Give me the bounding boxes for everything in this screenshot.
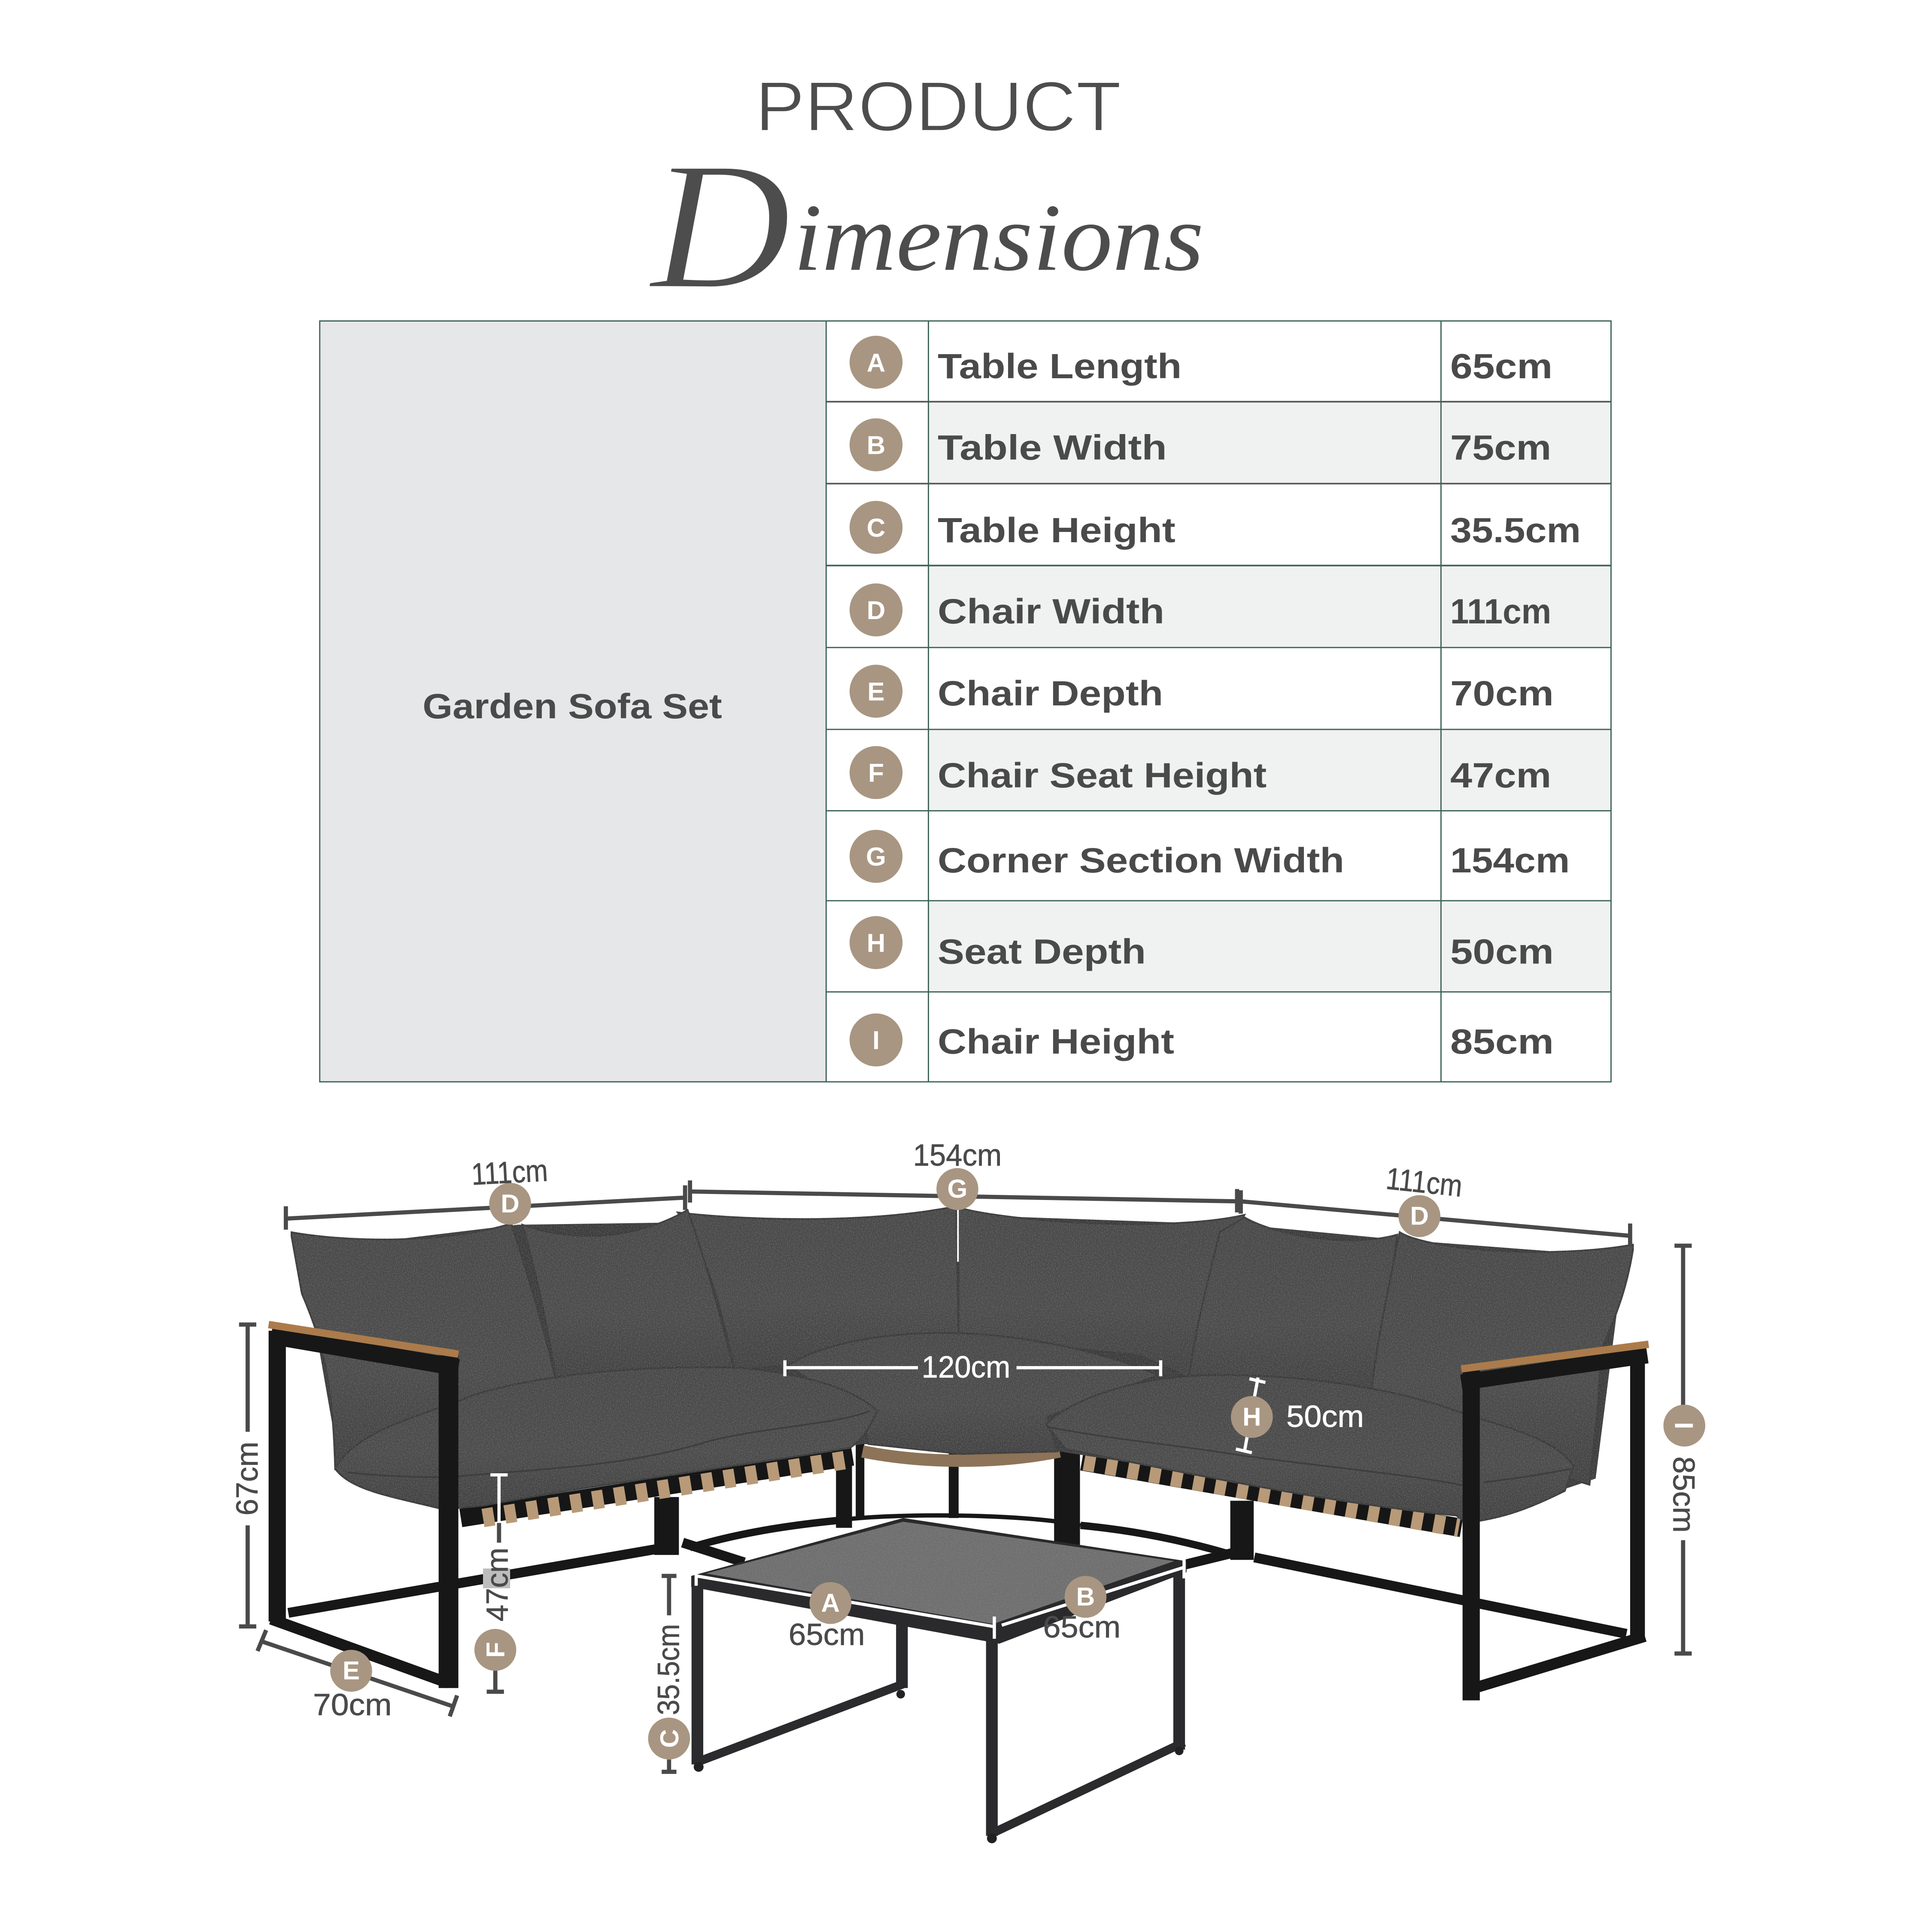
row D: chair width: D: [867, 595, 885, 625]
dimension H: H: [1242, 1402, 1261, 1431]
row H: seat depth: [850, 916, 1554, 971]
dimensions table: [320, 321, 1612, 1082]
left outer back cushion: [291, 1224, 557, 1469]
row B: table width: [850, 418, 1551, 471]
row E: chair depth: [850, 665, 1554, 718]
table measure lines: [696, 1558, 1184, 1639]
row A: table length: [850, 336, 1552, 389]
dimension D left: D: [501, 1189, 519, 1218]
row E: chair depth: E: [867, 677, 885, 706]
row D: chair width: Chair Width: [938, 592, 1164, 631]
row C: table height: Table Height: [938, 511, 1176, 550]
dimension I: 85cm: [1666, 1456, 1701, 1533]
back cushions and seat cushions: [291, 1206, 1634, 1523]
dimension A: 65cm: [789, 1617, 865, 1652]
row D: chair width: [850, 583, 1551, 636]
row E: chair depth: 70cm: [1450, 674, 1554, 713]
title: Dimensions: imensions: [793, 185, 1204, 291]
title: PRODUCT: PRODUCT: [755, 67, 1121, 146]
row I: chair height: [850, 1013, 1554, 1066]
row I: chair height: 85cm: [1450, 1022, 1554, 1061]
title: Dimensions: [647, 125, 1204, 327]
right inner back cushion: [1189, 1217, 1397, 1395]
cushion seams: [347, 1411, 1571, 1486]
centre seat cushion: [789, 1333, 1158, 1454]
dimension B: B: [1076, 1582, 1095, 1611]
product illustration: garden sofa set: [269, 1206, 1649, 1843]
sofa frame rear rails and legs: [289, 1444, 1626, 1634]
dimension E: [258, 1630, 457, 1722]
row B: table width: Table Width: [938, 428, 1167, 467]
table top frame: [691, 1518, 1187, 1643]
row G: corner section width: 154cm: [1450, 841, 1570, 880]
dimension C: 35.5cm: [651, 1624, 686, 1715]
row E: chair depth: Chair Depth: [938, 674, 1163, 713]
seat webbing: [461, 1452, 1461, 1528]
row F: chair seat height: Chair Seat Height: [938, 756, 1267, 795]
dimension D right: D: [1410, 1201, 1429, 1230]
row F: chair seat height: F: [868, 758, 884, 787]
dimension annotations: [230, 1138, 1705, 1772]
dimension F: [474, 1475, 516, 1692]
title: Dimensions: D: [647, 125, 791, 327]
dimension D left: [286, 1154, 685, 1230]
table feet: [694, 1690, 1184, 1843]
dimension C: C: [655, 1729, 684, 1748]
table grid lines: [826, 321, 1611, 1082]
row A: table length: 65cm: [1450, 347, 1552, 386]
table top surface: [706, 1522, 1174, 1624]
row A: table length: A: [867, 348, 885, 377]
dimension A: A: [821, 1588, 840, 1617]
row F: chair seat height: 47cm: [1450, 756, 1551, 795]
dimension E: E: [343, 1656, 360, 1685]
dimension H: [1231, 1378, 1364, 1453]
row B: table width: 75cm: [1450, 428, 1551, 467]
panel: product name cell: Garden Sofa Set: [422, 687, 722, 726]
right armrest frame: [1461, 1344, 1649, 1700]
dimension G: 154cm: [913, 1138, 1002, 1173]
centre left back cushion: [677, 1206, 959, 1370]
left inner back cushion: [522, 1210, 734, 1385]
dimension 120cm: [785, 1350, 1160, 1385]
row C: table height: 35.5cm: [1450, 511, 1581, 550]
cushion backing: [302, 1215, 1624, 1518]
dimension F: 47cm: [480, 1548, 514, 1622]
dimension G: G: [947, 1174, 967, 1203]
dimension B: [1043, 1576, 1121, 1644]
dimension 67cm: [230, 1323, 264, 1626]
centre right back cushion: [959, 1207, 1245, 1378]
row H: seat depth: 50cm: [1450, 932, 1554, 971]
table legs: [697, 1567, 1184, 1836]
row C: table height: C: [867, 513, 885, 542]
dimension 67cm: 67cm: [230, 1442, 264, 1516]
row G: corner section width: Corner Section Width: [938, 841, 1344, 880]
row I: chair height: I: [872, 1026, 880, 1055]
row G: corner section width: G: [866, 842, 886, 871]
row shading: [928, 402, 1612, 992]
row A: table length: Table Length: [938, 347, 1182, 386]
left wooden arm cap: [269, 1324, 459, 1354]
coffee table: [691, 1518, 1187, 1843]
dimension H: 50cm: [1286, 1399, 1364, 1434]
right wooden arm cap: [1461, 1344, 1649, 1369]
dimension I: I: [1670, 1422, 1699, 1429]
left seat cushion: [335, 1367, 877, 1510]
row F: chair seat height: [850, 746, 1551, 799]
row C: table height: [850, 501, 1581, 554]
dimension A: [789, 1582, 865, 1652]
row H: seat depth: H: [867, 928, 885, 957]
gap between centre back cushions: [957, 1209, 958, 1262]
dimension C: [648, 1576, 690, 1772]
dimension I: [1663, 1245, 1705, 1653]
left armrest frame: [269, 1324, 459, 1688]
dimension B: 65cm: [1043, 1610, 1121, 1644]
dimension G: [690, 1138, 1237, 1212]
dimension 120cm: 120cm: [922, 1350, 1010, 1385]
row B: table width: B: [867, 431, 885, 460]
dimension D right: [1241, 1161, 1630, 1247]
dimension F: F: [481, 1642, 510, 1658]
dimension D right: 111cm: [1385, 1161, 1464, 1203]
row H: seat depth: Seat Depth: [938, 932, 1146, 971]
row G: corner section width: [850, 830, 1570, 883]
panel: product name cell: [320, 321, 826, 1082]
right seat cushion: [1046, 1375, 1574, 1523]
dimension E: 70cm: [313, 1688, 392, 1722]
dimension D left: 111cm: [471, 1154, 549, 1192]
row I: chair height: Chair Height: [938, 1022, 1174, 1061]
right outer back cushion: [1371, 1232, 1634, 1485]
row D: chair width: 111cm: [1450, 592, 1551, 631]
